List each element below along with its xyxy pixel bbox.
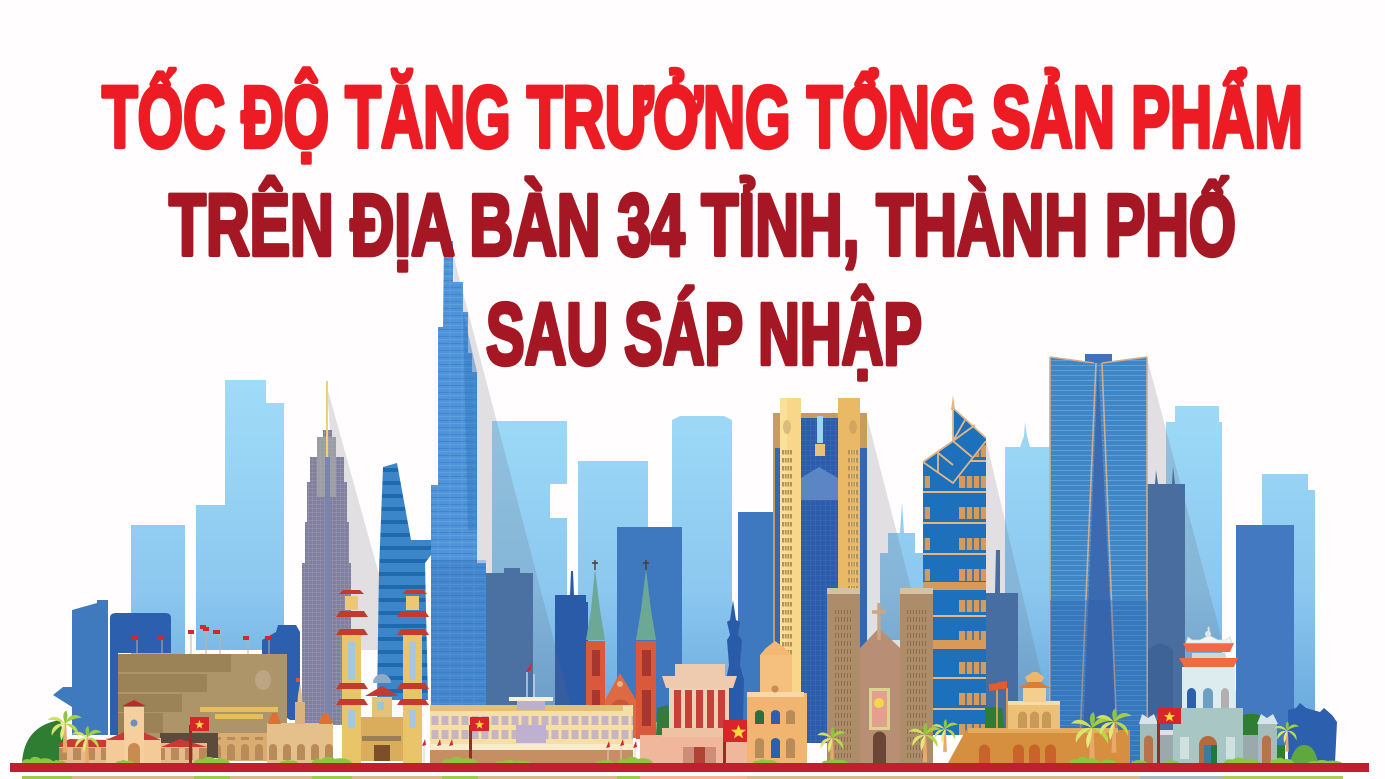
palm trees — [48, 708, 1299, 763]
green hills right — [1243, 714, 1318, 763]
tower: Landmark 81 — [431, 241, 486, 705]
tower: gold twin-pillar tower — [773, 398, 867, 743]
tower: tallest glass tower — [1050, 354, 1147, 763]
flag: market flag — [189, 717, 209, 763]
building: Ho Chi Minh mausoleum — [640, 664, 747, 763]
green hill left — [22, 720, 70, 763]
skyline: mid and dark blue buildings — [53, 466, 1337, 763]
building: city hall — [218, 678, 333, 763]
small red flags — [422, 739, 637, 763]
building: Hanoi flag-tower gate — [948, 672, 1130, 763]
building: Independence Palace — [430, 662, 633, 763]
bushes along the street — [22, 757, 1342, 763]
tower: Bitexco-style tower — [377, 463, 437, 700]
street reflection strip — [22, 776, 1343, 779]
building: Temple of Literature gate — [1139, 627, 1278, 763]
title line 3: SAU SÁP NHẬP — [486, 286, 922, 383]
building: Notre-Dame cathedral Saigon — [586, 560, 672, 740]
red ground bar — [10, 763, 1369, 772]
building: conference hall — [118, 654, 287, 758]
tower shadows — [327, 250, 1250, 745]
skyline: light blue background buildings — [131, 380, 1315, 763]
small rooftop flags — [132, 625, 271, 654]
flag: mausoleum flag — [723, 720, 754, 763]
tower: Vietcombank-style spire tower — [302, 381, 351, 725]
building: colonial clock tower building — [747, 641, 807, 763]
flag: temple flag — [1157, 708, 1181, 763]
building: St Joseph cathedral — [827, 588, 933, 763]
building: Cao Dai temple — [336, 590, 429, 763]
building: Ben Thanh market — [59, 700, 207, 763]
flag: palace flag — [469, 717, 489, 763]
tower: diamond crown bank tower — [923, 395, 986, 735]
